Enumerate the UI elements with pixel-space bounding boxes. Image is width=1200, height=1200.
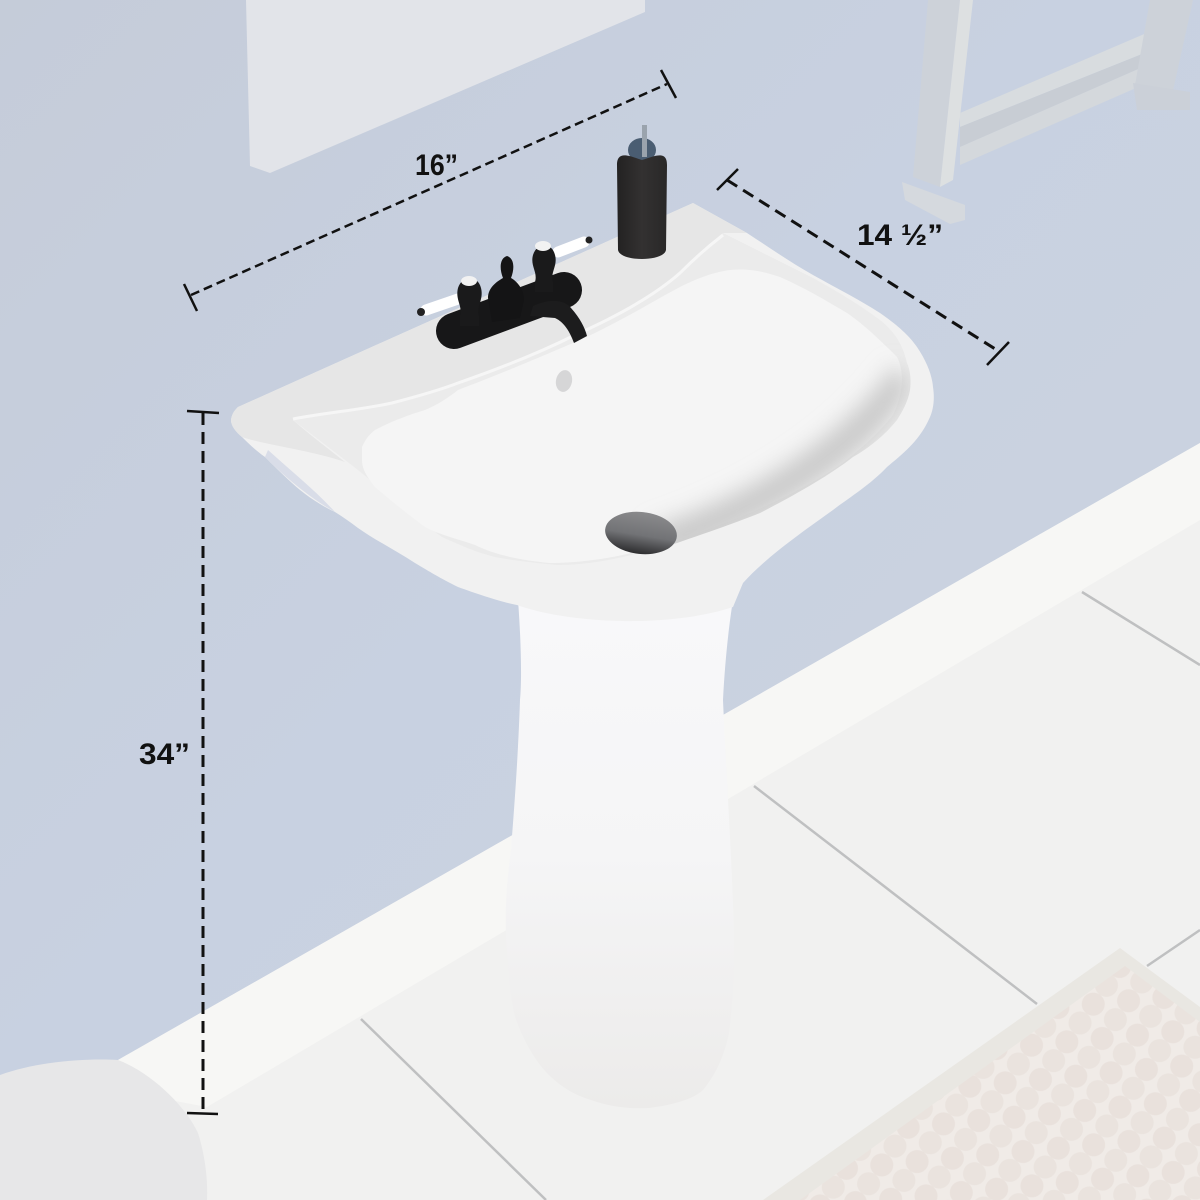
towel rack bbox=[902, 0, 1193, 224]
spout bbox=[530, 301, 587, 343]
center body and pop-up bbox=[488, 256, 524, 322]
mirror bbox=[246, 0, 645, 173]
deck shading bbox=[231, 203, 747, 462]
pedestal sink bbox=[231, 203, 934, 835]
handle left bbox=[457, 278, 482, 326]
baseboard bbox=[118, 443, 1200, 1107]
floor tile joints bbox=[361, 592, 1200, 1200]
label: 14 1/2 in: 14 ½” bbox=[857, 219, 943, 252]
label: 16 in: 16” bbox=[415, 149, 458, 182]
toilet edge bbox=[0, 1060, 207, 1200]
bowl light area bbox=[362, 269, 902, 563]
pedestal bbox=[506, 600, 734, 1108]
handle right bbox=[532, 245, 556, 292]
white lever left bbox=[417, 299, 458, 316]
basin underside shadow bbox=[265, 450, 335, 512]
drain bbox=[603, 508, 679, 558]
white lever right bbox=[558, 236, 592, 252]
dimension: height 34 in bbox=[187, 411, 219, 1114]
soap dispenser bbox=[617, 125, 667, 259]
basin rim bbox=[231, 203, 934, 621]
bowl shadow bbox=[660, 364, 910, 544]
inner basin bbox=[293, 233, 911, 565]
dimension: width 16 in bbox=[184, 70, 676, 311]
faucet bbox=[417, 236, 592, 343]
ridge highlight bbox=[293, 235, 723, 419]
overflow hole bbox=[554, 369, 574, 393]
dimension: depth 14.5 in bbox=[717, 169, 1009, 365]
floor bbox=[118, 443, 1200, 1200]
base plate bbox=[454, 290, 564, 331]
label: 34 in: 34” bbox=[139, 738, 190, 771]
bath rug bbox=[763, 948, 1200, 1200]
